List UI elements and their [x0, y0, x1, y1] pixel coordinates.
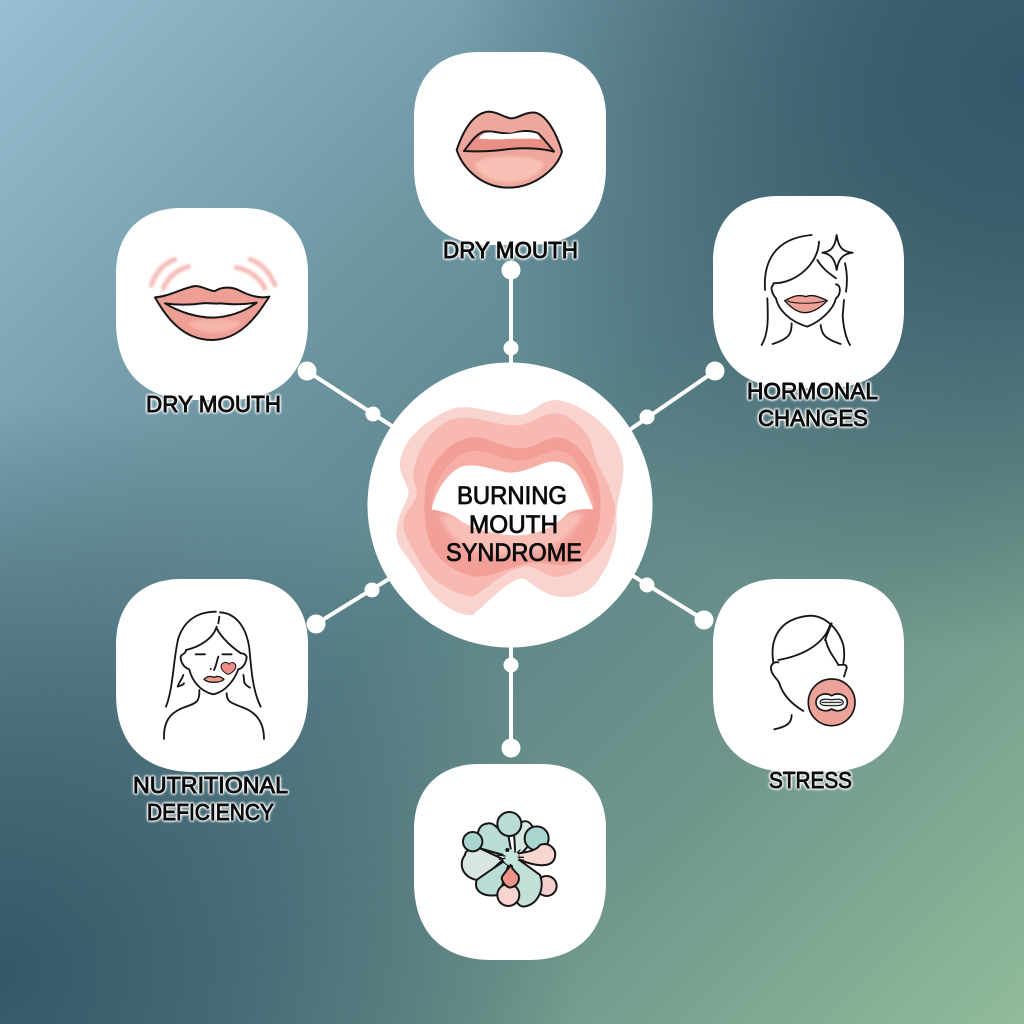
connector: upper right: [628, 362, 724, 431]
label: DRY MOUTH: [146, 391, 281, 417]
icon: smiling lips with heat waves: [152, 259, 275, 340]
icon: parted lips: [457, 112, 562, 188]
connector: lower left: [306, 577, 392, 634]
icon: woman with lips and sparkle: [762, 235, 853, 345]
label: NUTRITIONAL: [133, 772, 288, 798]
connector: top: [502, 260, 520, 365]
card: [414, 764, 606, 960]
card: [713, 579, 904, 772]
connector: upper left: [298, 362, 395, 428]
panel: nutritional deficiency: [116, 579, 308, 825]
label: [133, 772, 288, 825]
card: [116, 208, 308, 400]
connector: bottom: [502, 645, 520, 758]
hub circle: [368, 362, 652, 648]
panel: bottom flower: [414, 764, 606, 960]
title: SYNDROME: [446, 539, 582, 567]
card: [713, 196, 904, 388]
label: CHANGES: [758, 405, 868, 431]
label: [747, 378, 878, 431]
label: HORMONAL: [747, 378, 878, 404]
label: STRESS: [769, 767, 852, 793]
card: [116, 579, 308, 772]
title: MOUTH: [469, 511, 558, 539]
icon: woman with heart on cheek: [164, 612, 264, 739]
panel: dry mouth left: [116, 208, 308, 417]
label: DEFICIENCY: [147, 799, 274, 825]
panel: hormonal changes: [713, 196, 904, 431]
label: DRY MOUTH: [443, 237, 578, 263]
panel: central hub: [368, 362, 652, 648]
panel: dry mouth top: [414, 52, 606, 263]
connector: lower right: [630, 574, 714, 630]
title: [446, 482, 582, 567]
icon: head with mouth badge: [771, 616, 855, 729]
illustration: burning mouth: [396, 400, 623, 615]
card: [414, 52, 606, 245]
panel: stress: [713, 579, 904, 793]
icon: flower of petals: [462, 812, 557, 907]
title: BURNING: [457, 482, 567, 510]
